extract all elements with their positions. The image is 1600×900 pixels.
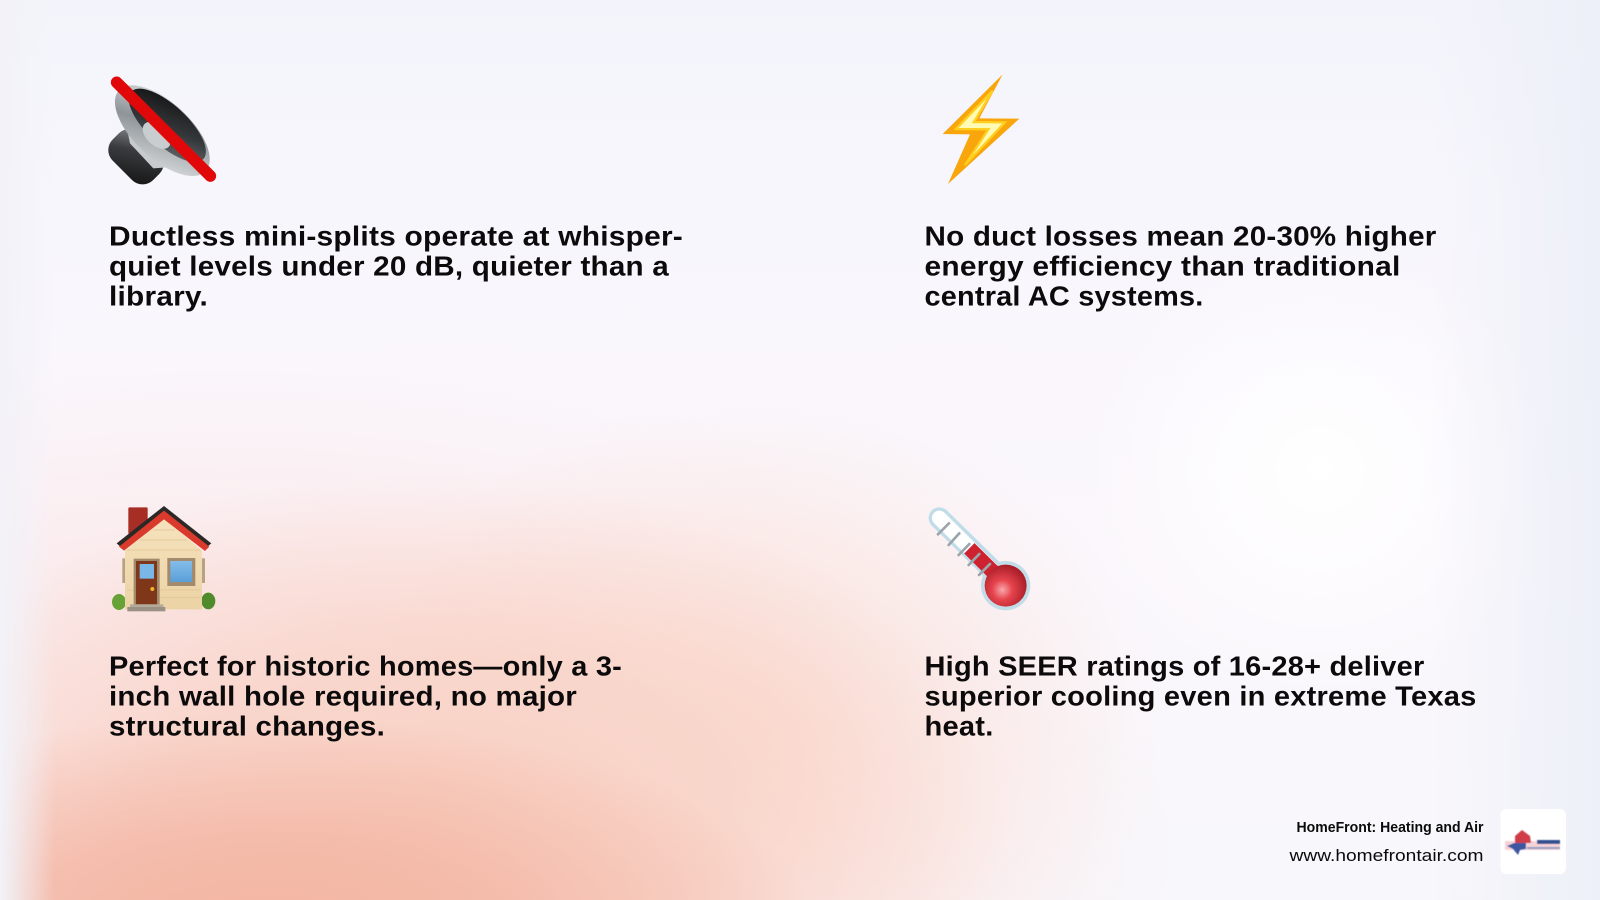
panel: high SEER ratings <box>924 518 1476 742</box>
text: high SEER ratings: superior cooling even in extreme Texas <box>924 680 1476 712</box>
text: historic homes <box>109 650 622 742</box>
website url: www.homefrontair.com <box>1288 846 1484 865</box>
text: quiet operation: library. <box>109 280 208 312</box>
icon: thermometer <box>938 518 1030 610</box>
icon: lightning bolt <box>943 74 1019 184</box>
text: quiet operation: quiet levels under 20 dB, quieter than a <box>109 250 669 282</box>
brand name: HomeFront: Heating and Air <box>1296 820 1484 836</box>
text: energy efficiency: energy efficiency than traditional <box>924 250 1400 282</box>
text: high SEER ratings <box>924 650 1476 742</box>
icon: house <box>112 506 215 611</box>
text: high SEER ratings: High SEER ratings of 16-28+ deliver <box>924 650 1424 682</box>
text: quiet operation: Ductless mini-splits operate at whisper- <box>109 220 683 252</box>
logo tile <box>1500 809 1566 874</box>
text: energy efficiency: central AC systems. <box>924 280 1204 312</box>
text: historic homes: inch wall hole required, no major <box>109 680 577 712</box>
text: historic homes: structural changes. <box>109 710 385 742</box>
panel: energy efficiency <box>924 74 1436 311</box>
text: high SEER ratings: heat. <box>924 710 994 742</box>
text: energy efficiency: No duct losses mean 20-30% higher <box>924 220 1436 252</box>
text: quiet operation <box>109 220 683 312</box>
text: historic homes: Perfect for historic homes—only a 3- <box>109 650 622 682</box>
text: energy efficiency <box>924 220 1436 312</box>
panel: historic homes <box>109 506 622 742</box>
footer: brand block <box>1288 809 1566 874</box>
panel: quiet operation <box>100 70 683 311</box>
icon: muted speaker <box>100 70 225 192</box>
